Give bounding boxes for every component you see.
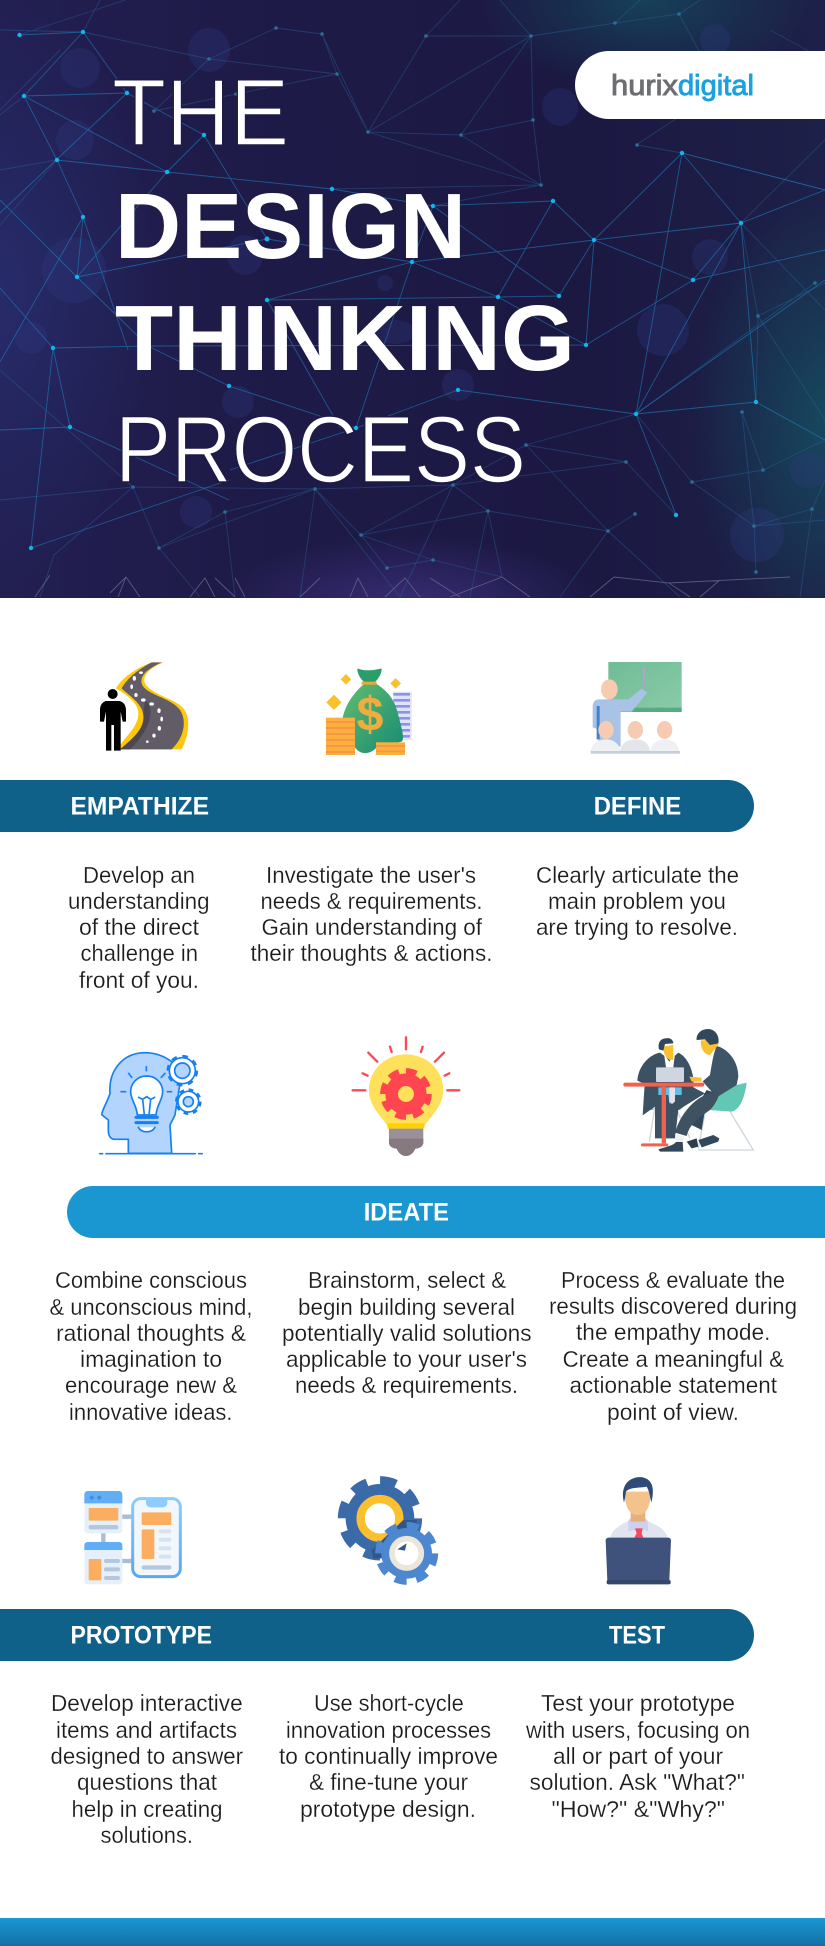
text: test description: all or part of your — [553, 1743, 723, 1769]
text: ideate description two: applicable to your user's — [286, 1346, 527, 1372]
footer bar — [0, 1918, 825, 1946]
text: empathize description: of the direct — [79, 914, 200, 940]
text: iterate description: & fine-tune your — [309, 1769, 468, 1795]
band: prototype and test: TEST — [609, 1622, 665, 1650]
text: ideate description three — [549, 1267, 797, 1425]
title: DESIGN — [115, 174, 466, 278]
title: THE — [112, 60, 289, 166]
band: prototype and test — [0, 1609, 754, 1661]
text: prototype description: solutions. — [100, 1822, 193, 1848]
text: define description — [536, 862, 739, 940]
text: ideate description three: Process & evaluate the — [561, 1267, 785, 1293]
text: ideate description three: Create a meaningful & — [563, 1346, 784, 1372]
icon: teacher and students — [591, 662, 682, 754]
band: empathize and define: EMPATHIZE — [70, 792, 209, 820]
text: ideate description one: innovative ideas. — [69, 1399, 232, 1425]
text: ideate description three: results discovered during — [549, 1293, 797, 1319]
node over title — [264, 236, 270, 242]
text: empathize description: understanding — [68, 888, 210, 914]
title — [112, 60, 575, 503]
text: ideate description one: imagination to — [80, 1346, 222, 1372]
text: ideate description two — [282, 1267, 532, 1398]
text: ideate description two: begin building several — [298, 1294, 515, 1320]
text: ideate description one: encourage new & — [65, 1372, 237, 1398]
text: empathize description — [68, 862, 210, 993]
text: research description: Investigate the user's — [266, 862, 476, 888]
text: ideate description two: potentially valid solutions — [282, 1320, 532, 1346]
band: empathize and define: DEFINE — [594, 792, 681, 820]
text: ideate description two: needs & requirements. — [295, 1372, 518, 1398]
text: iterate description: prototype design. — [300, 1796, 476, 1822]
text: empathize description: front of you. — [79, 967, 199, 993]
title: THINKING — [115, 286, 575, 390]
text: empathize description: Develop an — [83, 862, 195, 888]
text: prototype description: Develop interactive — [51, 1690, 243, 1716]
text: test description: solution. Ask "What?" — [530, 1769, 745, 1795]
text: define description: Clearly articulate the — [536, 862, 739, 888]
text: define description: main problem you — [548, 888, 726, 914]
text: ideate description three: point of view. — [607, 1399, 739, 1425]
text: research description: Gain understanding of — [262, 914, 483, 940]
text: ideate description three: actionable statement — [570, 1372, 778, 1398]
text: empathize description: challenge in — [80, 940, 198, 966]
text: test description — [525, 1690, 750, 1822]
text: test description: Test your prototype — [541, 1690, 735, 1716]
network background — [0, 0, 825, 598]
band: empathize and define — [0, 780, 754, 832]
logo badge: hurix — [611, 70, 679, 102]
text: prototype description: help in creating — [72, 1796, 222, 1822]
icon: wireframe screens — [84, 1491, 180, 1584]
text: ideate description two: Brainstorm, select & — [308, 1267, 506, 1293]
text: prototype description — [50, 1690, 243, 1848]
text: research description: needs & requirements. — [260, 888, 482, 914]
text: ideate description one — [50, 1267, 252, 1425]
text: test description: "How?" &"Why?" — [552, 1796, 725, 1822]
text: prototype description: questions that — [77, 1769, 218, 1795]
icon: light bulb with gear — [353, 1037, 459, 1156]
icon: money bag — [326, 668, 412, 755]
text: iterate description: Use short-cycle — [314, 1690, 464, 1716]
logo badge: digital — [678, 70, 754, 102]
text: ideate description one: Combine conscious — [55, 1267, 247, 1293]
icon: gears — [342, 1481, 435, 1581]
text: prototype description: items and artifacts — [56, 1717, 237, 1743]
text: ideate description one: rational thoughts & — [56, 1320, 246, 1346]
text: research description — [250, 862, 492, 966]
text: iterate description: innovation processes — [286, 1717, 491, 1743]
icon: two men meeting — [623, 1029, 753, 1152]
text: prototype description: designed to answer — [50, 1743, 243, 1769]
band: ideate: IDEATE — [364, 1198, 449, 1226]
text: test description: with users, focusing on — [525, 1717, 750, 1743]
icon: road and person — [100, 662, 188, 751]
header panel — [0, 0, 825, 598]
band: ideate — [67, 1186, 825, 1238]
band: prototype and test: PROTOTYPE — [70, 1622, 212, 1650]
icon: money bag: $ — [357, 688, 384, 742]
logo badge — [575, 51, 825, 119]
text: iterate description — [279, 1690, 498, 1822]
icon: person at laptop — [606, 1477, 671, 1584]
text: ideate description one: & unconscious mind, — [50, 1294, 252, 1320]
title: PROCESS — [115, 397, 526, 503]
text: research description: their thoughts & actions. — [250, 940, 492, 966]
icon: head with light bulb and gears — [100, 1053, 202, 1154]
text: iterate description: to continually improve — [279, 1743, 498, 1769]
text: ideate description three: the empathy mode. — [576, 1319, 770, 1345]
text: define description: are trying to resolve. — [536, 914, 738, 940]
